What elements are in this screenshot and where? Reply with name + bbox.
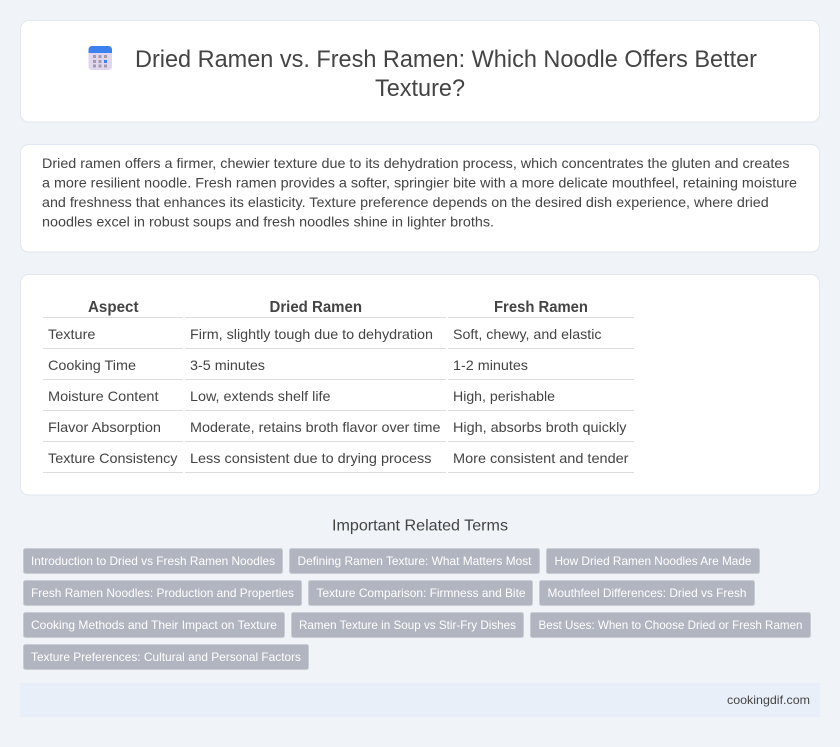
table row: texture consistency [48,450,629,466]
table row: texture [48,326,602,342]
tag: Cooking Methods and Their Impact on Texture [31,618,277,632]
related term tags [24,548,810,670]
text block: introduction: Dried ramen offers a firmer, chewier texture due to its dehydration process, which concentrates the gluten and creates [42,155,789,171]
title: Texture? [375,75,465,102]
tag: Fresh Ramen Noodles: Production and Properties [31,586,294,600]
table row: moisture content: Moisture Content [48,388,159,404]
table row: texture consistency: Texture Consistency [48,450,178,466]
tag [24,612,284,638]
tag [24,644,308,670]
table row: flavor absorption: Moderate, retains broth flavor over time [190,419,441,435]
tag [530,612,810,638]
table row: flavor absorption: Flavor Absorption [48,419,161,435]
table row: texture: Texture [48,326,96,342]
tag [24,580,302,606]
footer [20,683,820,717]
table header [88,299,588,316]
table row: moisture content [48,388,555,404]
tag [308,580,532,606]
tag [540,580,754,606]
tag: Ramen Texture in Soup vs Stir-Fry Dishes [299,618,516,632]
table header: Dried Ramen [270,299,362,316]
title: Dried Ramen vs. Fresh Ramen: Which Noodle Offers Better [135,46,757,73]
table header: Fresh Ramen [494,299,588,316]
title [135,46,757,102]
tag [290,548,540,574]
table row: cooking time: Cooking Time [48,357,136,373]
tag: Best Uses: When to Choose Dried or Fresh Ramen [538,618,802,632]
panel: header [20,20,820,122]
tag: Introduction to Dried vs Fresh Ramen Noodles [31,554,275,568]
table row: flavor absorption: High, absorbs broth quickly [453,419,626,435]
table row: texture consistency: More consistent and tender [453,450,629,466]
table row: cooking time: 1-2 minutes [453,357,528,373]
tag: How Dried Ramen Noodles Are Made [554,554,752,568]
tag: Defining Ramen Texture: What Matters Most [298,554,532,568]
tag: Mouthfeel Differences: Dried vs Fresh [548,586,746,600]
tag [292,612,524,638]
table row: cooking time [48,357,528,373]
text block: introduction: noodles excel in robust soups and fresh noodles shine in lighter broths. [42,214,494,230]
icon: calendar [88,46,112,70]
footer source text: cookingdif.com [727,693,810,707]
table row: cooking time: 3-5 minutes [190,357,265,373]
text block: introduction [42,155,797,230]
tag: Texture Comparison: Firmness and Bite [316,586,526,600]
table row: texture consistency: Less consistent due to drying process [190,450,432,466]
table row: moisture content: High, perishable [453,388,555,404]
table row: texture: Soft, chewy, and elastic [453,326,602,342]
table header: Aspect [88,299,139,316]
tag [24,548,282,574]
tag: Texture Preferences: Cultural and Personal Factors [31,650,301,664]
table row: flavor absorption [48,419,626,435]
text block: introduction: a more resilient noodle. Fresh ramen provides a softer, springier bite with a more delicate mouthfeel, retaining moisture [42,174,797,190]
text block: introduction: and freshness that enhances its elasticity. Texture preference depends on the desired dish experience, where dried [42,194,769,210]
heading: related terms: Important Related Terms [332,518,508,534]
table row: texture: Firm, slightly tough due to dehydration [190,326,433,342]
panel: comparison table [20,274,820,495]
table row: moisture content: Low, extends shelf life [190,388,331,404]
tag [546,548,760,574]
panel: introduction [20,144,820,252]
